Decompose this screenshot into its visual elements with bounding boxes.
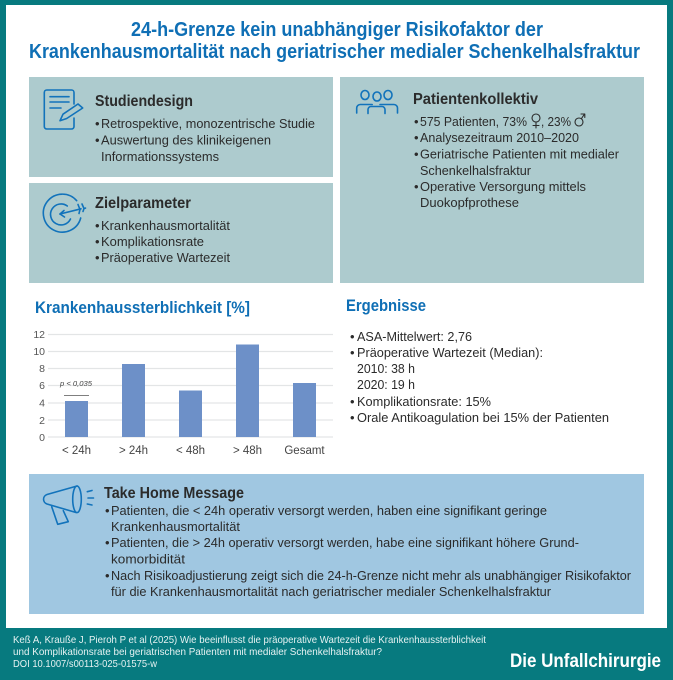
text block: Patienten, die > 24h operativ versorgt werden, habe eine signifikant höhere Grund-	[111, 535, 579, 550]
text block: Informationssystems	[101, 149, 219, 164]
icon: female symbol	[532, 114, 540, 128]
chart heading: Krankenhaussterblichkeit [%]	[35, 299, 250, 317]
footer citation: DOI 10.1007/s00113-025-01575-w	[13, 658, 157, 670]
x axis labels: Gesamt	[284, 445, 325, 457]
text block: •	[414, 179, 419, 194]
y axis labels: 8	[39, 363, 45, 375]
results text block: Komplikationsrate: 15%	[357, 394, 491, 409]
text block: •	[414, 146, 419, 162]
results text block: ASA-Mittelwert: 2,76	[357, 329, 472, 344]
icon: male symbol	[575, 114, 585, 126]
text block: komorbidität	[111, 552, 185, 566]
footer citation	[13, 634, 486, 670]
results heading: Ergebnisse	[346, 297, 426, 315]
x axis labels: < 24h	[62, 445, 91, 457]
text block: Komplikationsrate	[101, 234, 204, 249]
results text block: Präoperative Wartezeit (Median):	[357, 345, 543, 360]
text block	[414, 114, 620, 210]
text block: •	[95, 116, 100, 131]
text block: •	[95, 250, 100, 265]
text block: •	[105, 503, 110, 518]
results text block: 2010: 38 h	[357, 361, 415, 376]
results text block: •	[350, 394, 355, 409]
heading: Patientenkollektiv	[413, 91, 538, 108]
text block: •	[95, 132, 100, 148]
text block: Auswertung des klinikeigenen	[101, 132, 271, 148]
y axis labels: 12	[33, 329, 45, 341]
bars	[65, 344, 316, 437]
text block: •	[95, 234, 100, 249]
results text block	[350, 329, 609, 425]
y axis labels: 0	[39, 432, 45, 444]
text block: Präoperative Wartezeit	[101, 250, 230, 265]
footer citation: Keß A, Krauße J, Pieroh P et al (2025) Wie beeinflusst die präoperative Wartezeit die Krankenhaussterblichkeit	[13, 634, 486, 646]
icon: target with arrow	[43, 194, 86, 232]
panel: Studiendesign	[29, 77, 333, 177]
text block: Analysezeitraum 2010–2020	[420, 130, 579, 145]
heading: Zielparameter	[95, 195, 191, 212]
text block: •	[105, 535, 110, 550]
text block: Duokopfprothese	[420, 195, 519, 210]
results text block: •	[350, 329, 355, 344]
results text block: 2020: 19 h	[357, 377, 415, 392]
significance annotation: p < 0,035	[59, 381, 92, 388]
text block: , 23%	[541, 114, 571, 129]
text block: •	[105, 568, 110, 583]
panel: Patientenkollektiv	[340, 77, 644, 283]
text block: Operative Versorgung mittels	[420, 179, 586, 194]
text block: Schenkelhalsfraktur	[420, 163, 532, 178]
x axis labels: > 48h	[233, 445, 262, 457]
title	[29, 19, 640, 63]
title: 24-h-Grenze kein unabhängiger Risikofaktor der	[131, 19, 543, 41]
text block: •	[414, 130, 419, 145]
significance annotation	[59, 381, 92, 396]
heading: Studiendesign	[95, 93, 193, 110]
text block: für die Krankenhausmortalität nach geriatrischer medialer Schenkelhalsfraktur	[111, 584, 552, 599]
y axis labels: 10	[33, 346, 45, 358]
text block: Geriatrische Patienten mit medialer	[420, 146, 620, 162]
y axis labels: 4	[39, 398, 45, 410]
footer citation: und Komplikationsrate bei geriatrischen Patienten mit medialer Schenkelhalsfraktur?	[13, 646, 382, 658]
text block: Nach Risikoadjustierung zeigt sich die 24-h-Grenze nicht mehr als unabhängiger Risikofaktor	[111, 568, 632, 583]
panel: Take Home Message	[29, 474, 644, 614]
y axis labels	[33, 329, 45, 444]
text block: Patienten, die < 24h operativ versorgt werden, haben eine signifikant geringe	[111, 503, 547, 518]
text block: Krankenhausmortalität	[111, 519, 240, 534]
y axis labels: 6	[39, 380, 45, 392]
results text block: Orale Antikoagulation bei 15% der Patienten	[357, 410, 609, 425]
icon: three people	[357, 90, 398, 114]
text block: Krankenhausmortalität	[101, 218, 230, 233]
text block	[95, 218, 230, 265]
text block	[95, 116, 315, 164]
results text block: •	[350, 345, 355, 360]
panel: Zielparameter	[29, 183, 333, 283]
x axis labels: > 24h	[119, 445, 148, 457]
text block	[105, 503, 632, 599]
y axis labels: 2	[39, 415, 45, 427]
bar chart	[33, 329, 333, 457]
icon: megaphone	[44, 486, 94, 524]
heading: Take Home Message	[104, 485, 244, 502]
text block: Retrospektive, monozentrische Studie	[101, 116, 315, 131]
x axis labels	[62, 445, 325, 457]
results text block: •	[350, 410, 355, 425]
text block: •	[95, 218, 100, 233]
text block: 575 Patienten, 73%	[420, 114, 527, 129]
x axis labels: < 48h	[176, 445, 205, 457]
text block: •	[414, 114, 419, 129]
icon: document with pen	[44, 90, 83, 129]
